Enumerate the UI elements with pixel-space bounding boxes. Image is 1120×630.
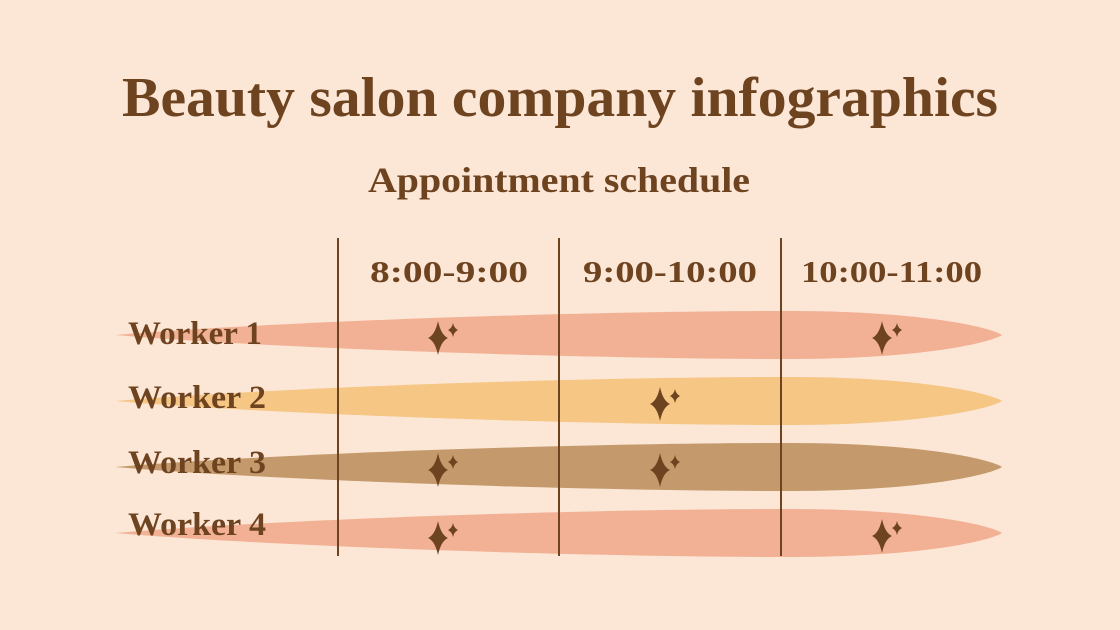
bar: worker 3	[115, 443, 1002, 491]
bar: worker 1	[115, 311, 1002, 359]
worker labels: Worker 3	[128, 445, 266, 481]
sparkle icons	[428, 321, 902, 555]
worker labels: Worker 1	[128, 316, 262, 352]
worker labels: Worker 4	[128, 507, 266, 543]
bar: worker 4	[115, 509, 1002, 557]
worker labels	[128, 316, 266, 543]
column headers: 8:00-9:00	[370, 254, 528, 289]
title: Beauty salon company infographics	[122, 67, 998, 129]
subtitle: Appointment schedule	[368, 160, 750, 200]
column headers: 10:00-11:00	[801, 254, 982, 289]
worker labels: Worker 2	[128, 380, 266, 416]
column headers: 9:00-10:00	[583, 254, 757, 289]
grid lines	[338, 238, 781, 556]
bar: worker 2	[115, 377, 1002, 425]
column headers	[370, 254, 982, 289]
